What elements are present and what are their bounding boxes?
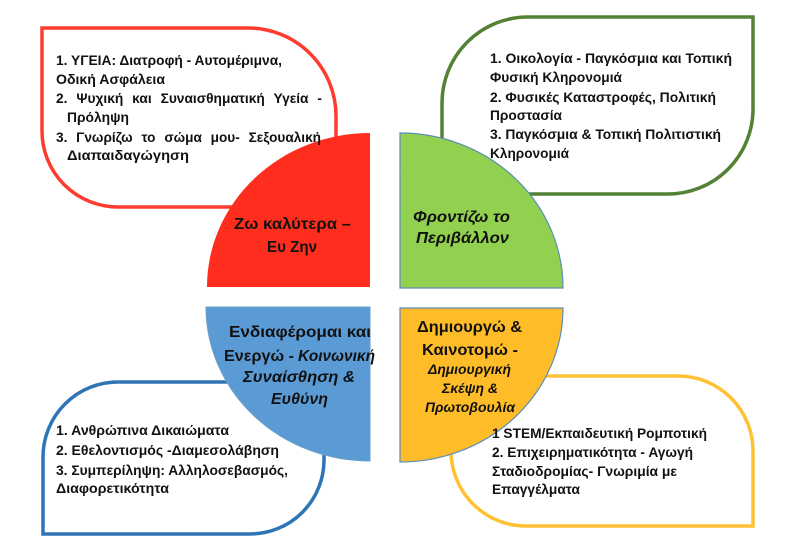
text block: environment list: Κληρονομιά [490, 146, 570, 161]
text block: health list: 1. ΥΓΕΙΑ: Διατροφή - Αυτομέριμνα, [56, 53, 282, 68]
text block: environment list: Φυσική Κληρονομιά [490, 70, 623, 85]
text block: social list: 1. Ανθρώπινα Δικαιώματα [56, 423, 230, 438]
heading: creativity [417, 319, 522, 415]
panel outline: environment (green) [442, 17, 753, 194]
heading: social: Συναίσθηση & [242, 369, 355, 386]
heading: social: Ενεργώ - [224, 348, 294, 365]
text block: social list: 2. Εθελοντισμός -Διαμεσολάβηση [56, 443, 279, 458]
text block: health list: 2. Ψυχική και Συναισθηματική Υγεία - [56, 91, 322, 106]
heading: social [224, 324, 375, 408]
heading: environment: Περιβάλλον [416, 230, 509, 247]
heading: environment [413, 209, 510, 247]
heading: social: Ευθύνη [271, 391, 328, 408]
heading: creativity: Δημιουργική [427, 361, 511, 377]
text block: health list: 3. Γνωρίζω το σώμα μου- Σεξουαλική [56, 130, 321, 145]
text block: creativity list: 1 STEM/Εκπαιδευτική Ρομποτική [492, 426, 707, 441]
quarter circle: social (blue) [206, 307, 370, 461]
text block: social list [56, 423, 288, 496]
heading: health [234, 216, 351, 256]
panel outline: health (red) [42, 28, 336, 207]
text block: environment list: 2. Φυσικές Καταστροφές, Πολιτική [490, 90, 716, 105]
text block: environment list: Προστασία [490, 108, 563, 123]
panel outline: social (blue) [43, 382, 324, 534]
quarter circle: environment (green) [400, 133, 563, 288]
text block: social list: Διαφορετικότητα [56, 481, 170, 496]
text block: health list [56, 53, 322, 163]
heading: creativity: Δημιουργώ & [417, 319, 522, 336]
heading: creativity: Σκέψη & [441, 380, 498, 396]
heading: social: Κοινωνική [298, 348, 375, 365]
text block: health list: Πρόληψη [67, 110, 129, 125]
text block: creativity list: Επαγγέλματα [492, 482, 581, 497]
heading: health: Ζω καλύτερα – [234, 216, 351, 233]
text block: social list: 3. Συμπερίληψη: Αλληλοσεβασμός, [56, 463, 288, 478]
text block: environment list: 3. Παγκόσμια & Τοπική Πολιτιστική [490, 127, 721, 142]
quarter circle: creativity (yellow) [400, 308, 563, 462]
text block: environment list: 1. Οικολογία - Παγκόσμια και Τοπική [490, 51, 732, 66]
text block: environment list [490, 51, 732, 161]
text block: creativity list: 2. Επιχειρηματικότητα - Αγωγή [492, 445, 693, 460]
text block: creativity list [492, 426, 707, 497]
heading: health: Ευ Ζην [267, 239, 317, 256]
text block: creativity list: Σταδιοδρομίας- Γνωριμία με [492, 464, 678, 479]
heading: creativity: Πρωτοβουλία [425, 399, 516, 415]
heading: creativity: Καινοτομώ - [422, 342, 518, 359]
heading: environment: Φροντίζω το [413, 209, 510, 226]
text block: health list: Διαπαιδαγώγηση [67, 148, 189, 163]
heading: social: Ενδιαφέρομαι και [229, 324, 371, 341]
panel outline: creativity (yellow) [451, 376, 753, 526]
text block: health list: Οδική Ασφάλεια [56, 72, 166, 87]
quarter circle: health (red) [207, 133, 370, 287]
